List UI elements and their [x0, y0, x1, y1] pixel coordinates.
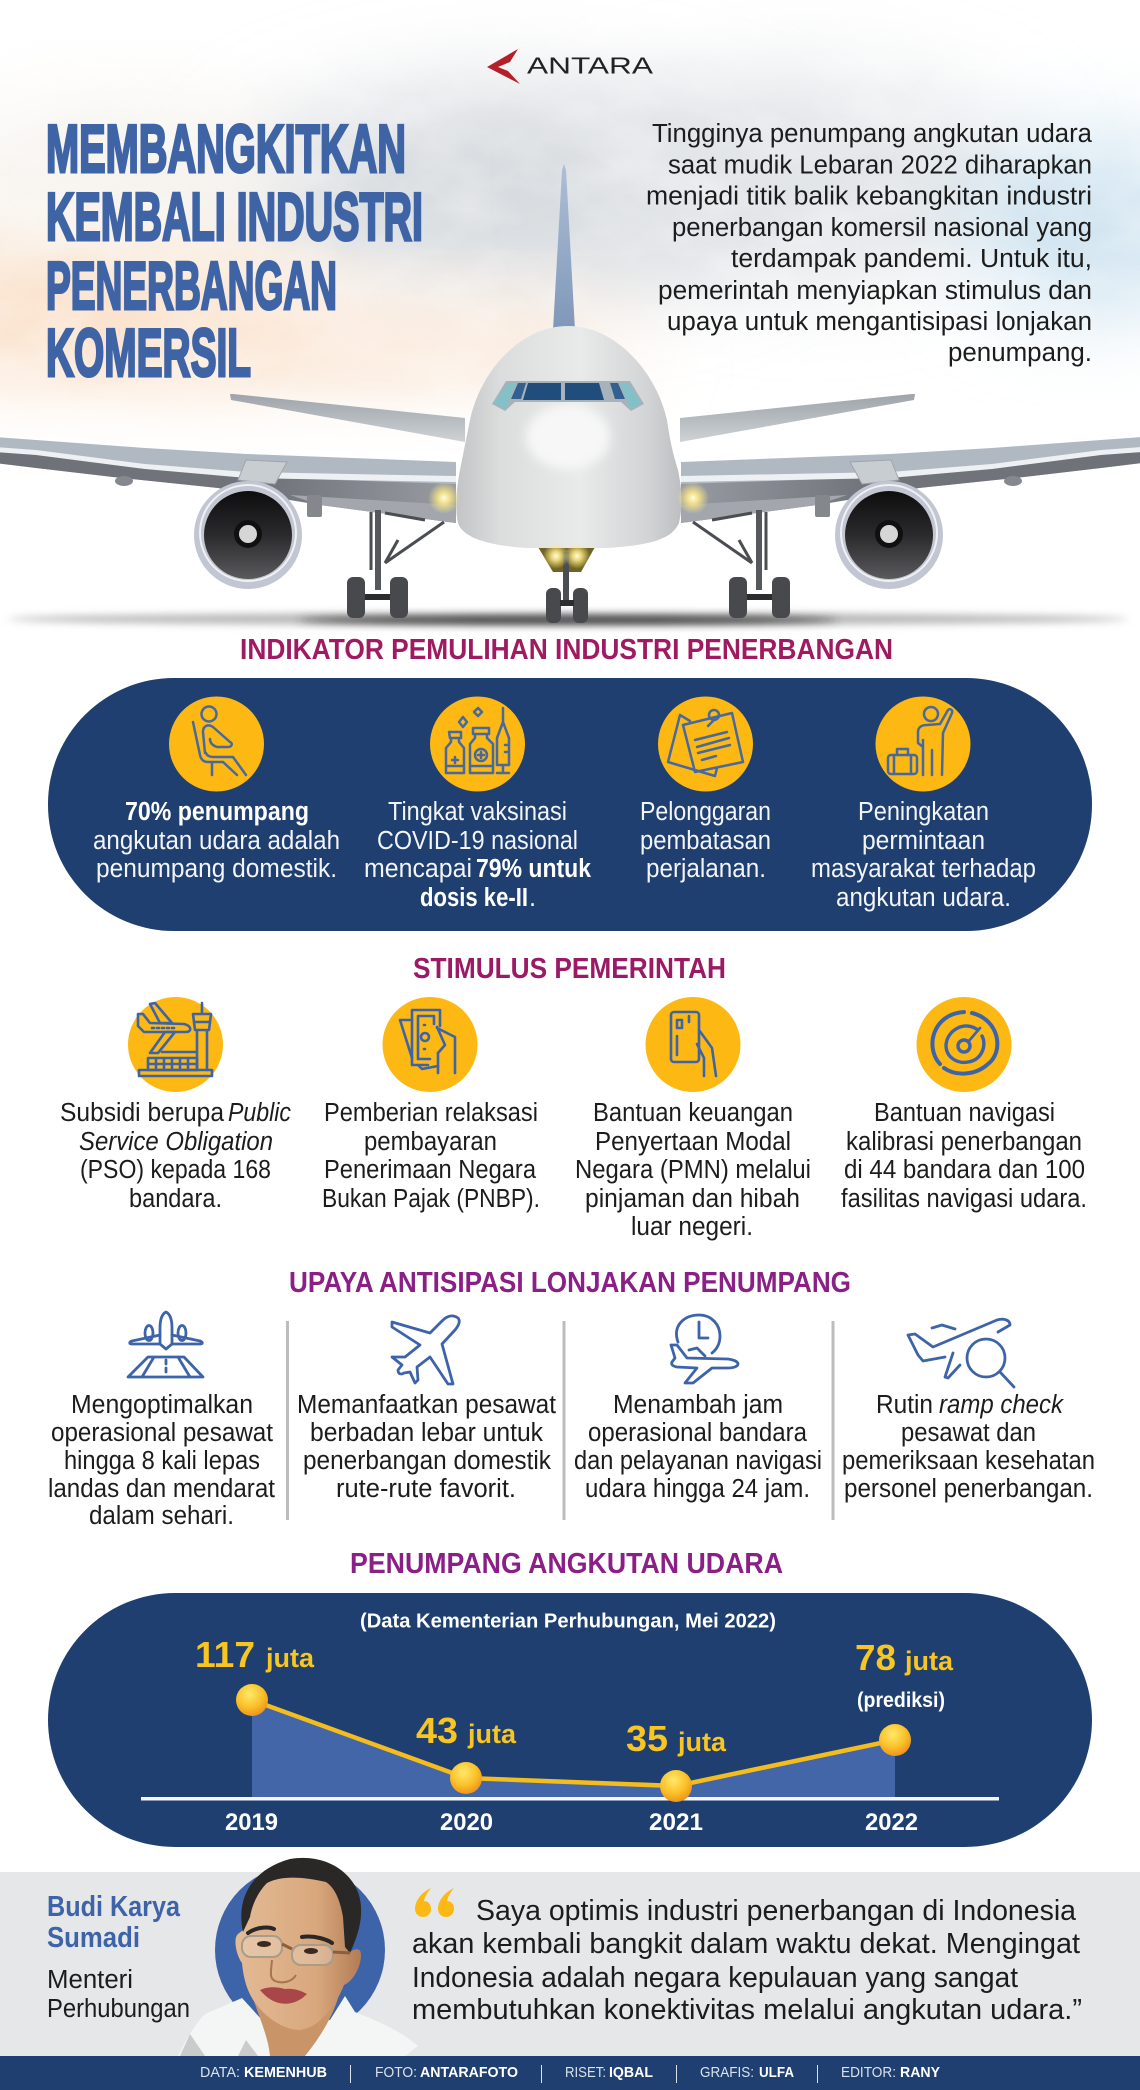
label 35 juta: juta — [677, 1727, 727, 1757]
text: tingkat vaksinasi: mencapai — [364, 855, 472, 883]
text: menambah jam: operasional bandara — [588, 1419, 808, 1447]
speaker name and role — [47, 1891, 190, 2023]
heading: indikator: INDIKATOR PEMULIHAN INDUSTRI PENERBANGAN — [240, 634, 893, 666]
text: pelonggaran: perjalanan. — [646, 855, 766, 883]
axis line — [141, 1797, 999, 1800]
text: bantuan keuangan: Negara (PMN) melalui — [575, 1156, 811, 1184]
label 117 juta: juta — [265, 1643, 315, 1673]
text: relaksasi PNBP: pembayaran — [364, 1128, 497, 1156]
landing lights — [428, 482, 709, 569]
text: peningkatan — [811, 798, 1036, 912]
intro text block: penumpang. — [948, 339, 1092, 367]
text: peningkatan: masyarakat terhadap — [811, 855, 1036, 883]
label 43 juta — [416, 1710, 517, 1751]
text: ramp check: pesawat dan — [901, 1419, 1036, 1447]
intro text block: upaya untuk mengantisipasi lonjakan — [667, 308, 1092, 336]
icon: plane on runway — [128, 1312, 203, 1377]
panel: upaya antisipasi — [48, 1312, 1095, 1530]
icon: notes — [658, 696, 753, 792]
text: subsidi PSO: Subsidi berupa — [60, 1099, 225, 1127]
data point 2019 — [236, 1684, 268, 1716]
footer credits: ANTARAFOTO — [420, 2064, 518, 2081]
footer credits: KEMENHUB — [244, 2064, 327, 2081]
intro text block: Tingginya penumpang angkutan udara — [652, 120, 1093, 148]
label 78 juta prediksi: 78 — [855, 1637, 896, 1678]
title: MEMBANGKITKAN — [46, 111, 406, 187]
intro text block — [646, 120, 1093, 367]
axis years: 2022 — [865, 1809, 918, 1836]
text: tingkat vaksinasi: COVID-19 nasional — [377, 827, 578, 855]
text: memanfaatkan: penerbangan domestik — [303, 1447, 551, 1475]
text: subsidi PSO: (PSO) kepada 168 — [80, 1156, 271, 1184]
text: mengoptimalkan: hingga 8 kali lepas — [64, 1447, 260, 1475]
speaker name and role: Menteri — [47, 1966, 133, 1994]
horizontal stabilisers — [230, 394, 915, 442]
text: bantuan navigasi: di 44 bandara dan 100 — [844, 1156, 1085, 1184]
footer credits: DATA: — [200, 2064, 240, 2081]
icon: card in hand — [646, 997, 740, 1092]
label 35 juta — [626, 1718, 727, 1759]
text: 70% penumpang — [93, 798, 340, 883]
icon: traveller — [876, 696, 970, 792]
icon: seated passenger — [169, 696, 264, 792]
portrait illustration — [178, 1858, 418, 2056]
face — [235, 1872, 361, 2030]
text: 70% penumpang: angkutan udara adalah — [93, 827, 340, 855]
text: pelonggaran — [640, 798, 771, 883]
quote band — [0, 1858, 1140, 2056]
footer credits: RANY — [900, 2064, 940, 2081]
icon: gauge — [916, 997, 1012, 1092]
label 43 juta: 43 — [416, 1710, 458, 1751]
nose — [271, 1960, 296, 1982]
text: subsidi PSO: Public — [228, 1099, 291, 1127]
text: pelonggaran: Pelonggaran — [640, 798, 771, 826]
text: pelonggaran: pembatasan — [640, 827, 771, 855]
text: mengoptimalkan: landas dan mendarat — [48, 1475, 275, 1503]
quote text: Indonesia adalah negara kepulauan yang sangat — [412, 1962, 1018, 1994]
quote text: membutuhkan konektivitas melalui angkutan udara.” — [412, 1994, 1082, 2026]
speaker name and role: Budi Karya — [47, 1891, 181, 1923]
panel: indikator pemulihan — [48, 678, 1092, 931]
radome — [526, 405, 610, 469]
fuselage — [456, 326, 682, 548]
text: mengoptimalkan: dalam sehari. — [89, 1502, 234, 1530]
right engine — [835, 481, 943, 589]
hair — [241, 1858, 361, 1953]
sky and clouds background — [0, 0, 1140, 470]
area fill — [252, 1700, 895, 1798]
right landing gear — [693, 510, 790, 618]
text: bantuan keuangan: Penyertaan Modal — [595, 1128, 791, 1156]
lips — [260, 1987, 307, 2004]
axis years — [225, 1809, 918, 1836]
text: menambah jam — [574, 1391, 822, 1503]
left landing gear — [347, 510, 444, 618]
icon: clock and plane — [671, 1315, 738, 1383]
data point 2021 — [660, 1770, 692, 1802]
text: tingkat vaksinasi: dosis ke-II — [420, 884, 528, 912]
label 117 juta: 117 — [195, 1634, 255, 1675]
text: peningkatan: Peningkatan — [858, 798, 989, 826]
title: PENERBANGAN — [46, 248, 337, 324]
left engine — [194, 481, 302, 589]
axis years: 2019 — [225, 1809, 278, 1836]
axis years: 2020 — [440, 1809, 493, 1836]
glasses — [242, 1936, 350, 1965]
text: subsidi PSO: Service Obligation — [79, 1128, 273, 1156]
intro text block: terdampak pandemi. Untuk itu, — [731, 245, 1092, 273]
text: ramp check: ramp check — [939, 1391, 1064, 1419]
label 78 juta prediksi — [855, 1637, 954, 1712]
left wing — [0, 437, 456, 523]
footer credits: EDITOR: — [841, 2064, 896, 2081]
ANTARA logo: ANTARA — [527, 52, 654, 78]
text: mengoptimalkan: operasional pesawat — [51, 1419, 273, 1447]
text: menambah jam: dan pelayanan navigasi — [574, 1447, 822, 1475]
text: relaksasi PNBP — [322, 1099, 540, 1213]
text: 70% penumpang: penumpang domestik. — [96, 855, 337, 883]
text: tingkat vaksinasi: Tingkat vaksinasi — [388, 798, 567, 826]
text: peningkatan: angkutan udara. — [836, 884, 1011, 912]
ground shadow — [8, 613, 1128, 625]
icon: airport — [128, 997, 223, 1092]
text: mengoptimalkan — [48, 1391, 275, 1530]
text: bantuan navigasi: Bantuan navigasi — [874, 1099, 1055, 1127]
label 35 juta: 35 — [626, 1718, 668, 1759]
panel: stimulus pemerintah — [60, 997, 1087, 1241]
shirt — [178, 1996, 418, 2056]
tail fin — [553, 164, 575, 330]
right wing — [681, 437, 1140, 523]
footer credits: FOTO: — [375, 2064, 417, 2081]
neck — [252, 1990, 340, 2056]
data point 2022 — [879, 1724, 911, 1756]
text: tingkat vaksinasi — [364, 798, 592, 912]
text: bantuan navigasi: fasilitas navigasi udara. — [841, 1185, 1087, 1213]
title: KOMERSIL — [46, 315, 251, 391]
text: bantuan keuangan — [575, 1099, 811, 1241]
icon: money in hand — [382, 997, 478, 1092]
label 78 juta prediksi: juta — [904, 1646, 954, 1676]
heading: stimulus: STIMULUS PEMERINTAH — [413, 953, 726, 985]
axis years: 2021 — [649, 1809, 703, 1836]
text: memanfaatkan: Memanfaatkan pesawat — [297, 1391, 556, 1419]
text: tingkat vaksinasi: . — [529, 884, 536, 912]
heading: upaya antisipasi: UPAYA ANTISIPASI LONJAKAN PENUMPANG — [289, 1267, 851, 1299]
intro text block: saat mudik Lebaran 2022 diharapkan — [668, 152, 1092, 180]
chart source note: (Data Kementerian Perhubungan, Mei 2022) — [360, 1610, 776, 1632]
quote text: Saya optimis industri penerbangan di Indonesia — [476, 1895, 1077, 1927]
quote text: akan kembali bangkit dalam waktu dekat. Mengingat — [412, 1928, 1080, 1960]
footer credits: IQBAL — [609, 2064, 653, 2081]
text: bantuan keuangan: luar negeri. — [631, 1213, 753, 1241]
text: ramp check — [842, 1391, 1095, 1503]
intro text block: penerbangan komersil nasional yang — [672, 214, 1092, 242]
title — [46, 111, 423, 391]
icon: vaccine bottles — [430, 696, 525, 792]
quote text — [412, 1895, 1082, 2026]
text: mengoptimalkan: Mengoptimalkan — [71, 1391, 253, 1419]
label 78 juta prediksi: (prediksi) — [857, 1689, 945, 1712]
label 117 juta — [195, 1634, 315, 1675]
heading: penumpang angkutan udara: PENUMPANG ANGKUTAN UDARA — [350, 1548, 783, 1580]
text: menambah jam: udara hingga 24 jam. — [585, 1475, 810, 1503]
cockpit windows — [492, 381, 644, 411]
trend line — [252, 1700, 895, 1786]
speaker name and role: Sumadi — [47, 1922, 140, 1954]
footer credits: RISET: — [565, 2064, 606, 2081]
footer credits: ULFA — [759, 2064, 794, 2081]
text: memanfaatkan: berbadan lebar untuk — [310, 1419, 543, 1447]
text: relaksasi PNBP: Pemberian relaksasi — [324, 1099, 538, 1127]
eyebrows — [248, 1928, 332, 1943]
ANTARA logo — [487, 49, 654, 84]
text: bantuan keuangan: Bantuan keuangan — [593, 1099, 793, 1127]
text: ramp check: personel penerbangan. — [844, 1475, 1093, 1503]
wing pylons and fairings — [115, 460, 1022, 517]
title: KEMBALI INDUSTRI — [46, 179, 423, 255]
speaker name and role: Perhubungan — [47, 1995, 190, 2023]
text: menambah jam: Menambah jam — [613, 1391, 783, 1419]
logo mark — [487, 49, 520, 84]
footer credits — [0, 2056, 1140, 2090]
text: subsidi PSO: bandara. — [129, 1185, 222, 1213]
footer credits: GRAFIS: — [700, 2064, 754, 2081]
data point 2020 — [450, 1762, 482, 1794]
chart panel: passengers per year — [48, 1593, 1092, 1847]
text: relaksasi PNBP: Penerimaan Negara — [324, 1156, 537, 1184]
quote mark — [415, 1888, 454, 1917]
text: subsidi PSO — [60, 1099, 291, 1213]
airplane illustration — [0, 164, 1140, 625]
text: tingkat vaksinasi: 79% untuk — [476, 855, 592, 883]
icon: plane with magnifier — [908, 1319, 1014, 1387]
text: memanfaatkan — [297, 1391, 556, 1503]
text: ramp check: pemeriksaan kesehatan — [842, 1447, 1095, 1475]
nose gear — [538, 547, 595, 623]
text: bantuan navigasi — [841, 1099, 1087, 1213]
text: memanfaatkan: rute-rute favorit. — [336, 1475, 516, 1503]
text: bantuan navigasi: kalibrasi penerbangan — [846, 1128, 1082, 1156]
icon: airplane — [392, 1316, 459, 1384]
text: bantuan keuangan: pinjaman dan hibah — [585, 1185, 800, 1213]
text: relaksasi PNBP: Bukan Pajak (PNBP). — [322, 1185, 540, 1213]
eyes — [257, 1941, 318, 1954]
text: peningkatan: permintaan — [862, 827, 985, 855]
label 43 juta: juta — [467, 1719, 517, 1749]
text: 70% penumpang: 70% penumpang — [125, 798, 309, 826]
intro text block: menjadi titik balik kebangkitan industri — [646, 182, 1092, 210]
text: ramp check: Rutin — [876, 1391, 933, 1419]
intro text block: pemerintah menyiapkan stimulus dan — [658, 277, 1092, 305]
